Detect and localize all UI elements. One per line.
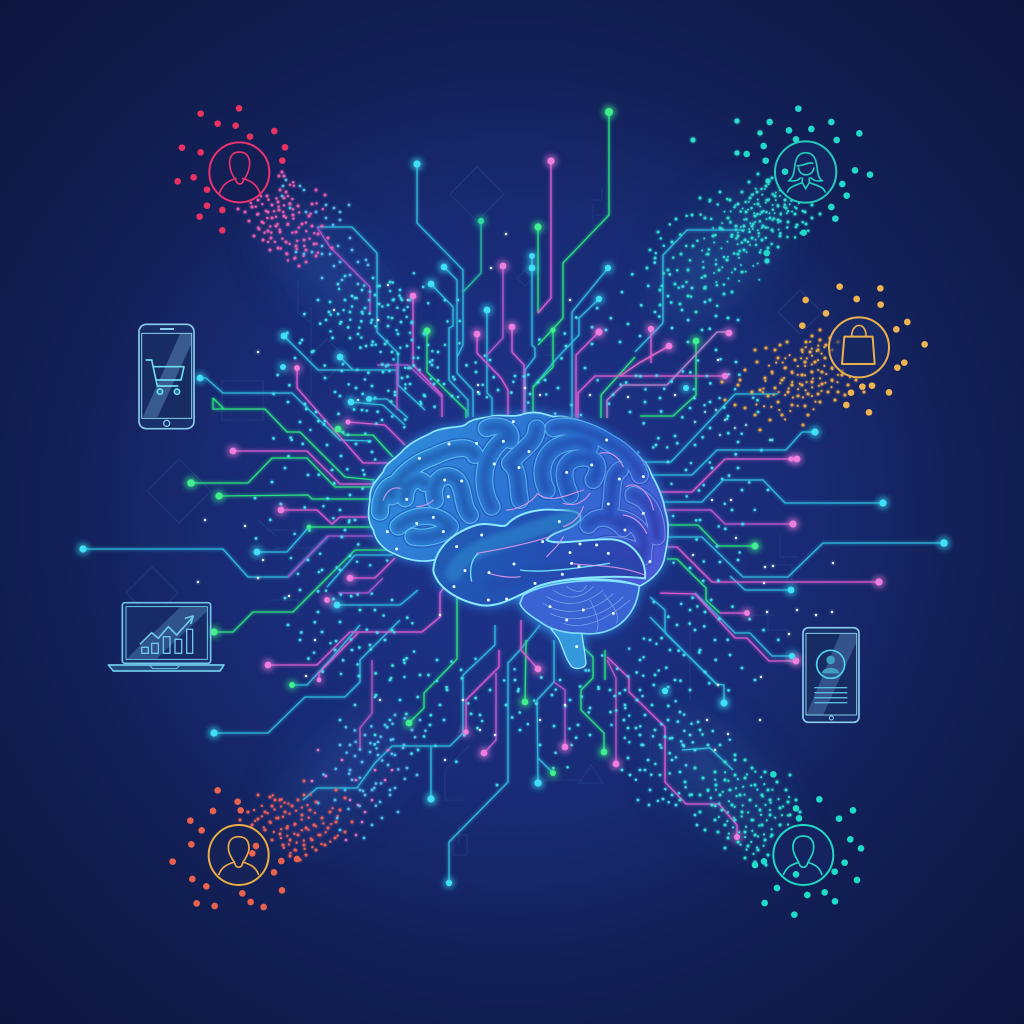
brain outer glow [369, 412, 668, 668]
particle stream: bottom left [240, 699, 427, 864]
icon: profile tablet [803, 628, 859, 722]
cerebrum silhouette [369, 412, 668, 606]
pink particles [238, 172, 332, 266]
particle stream: right orange [695, 330, 864, 440]
brain [369, 412, 668, 668]
circuit traces: pink and purple [233, 161, 879, 837]
brain stem [547, 623, 586, 668]
temporal lobe [433, 510, 645, 606]
blue particles [335, 715, 420, 838]
central white particles [198, 234, 833, 760]
brain sparkle dots [387, 422, 650, 647]
circuit traces: cyan [83, 164, 944, 883]
pink fold highlights [383, 453, 653, 577]
central cyan particles [255, 284, 772, 785]
icon: laptop with rising chart [108, 603, 224, 671]
cyan nodes [79, 160, 948, 886]
particle stream: top left [238, 172, 440, 400]
icon: orange person with dots [173, 790, 297, 907]
particle stream: top right [647, 121, 820, 318]
pink particles [312, 750, 392, 840]
cerebellum [520, 581, 639, 634]
cyan particles [326, 276, 434, 398]
green nodes [187, 108, 759, 776]
icon: teal person with dots [755, 774, 861, 915]
icon: shopping bag with amber dots [802, 287, 925, 412]
icon: shopping cart phone [139, 324, 194, 429]
icon: teal woman with dots [747, 109, 870, 253]
amber particles [722, 330, 864, 430]
sparse cyan particles [622, 690, 735, 825]
faint decorative circuitry [126, 167, 822, 855]
teal particles [680, 755, 800, 865]
teal particles [647, 172, 820, 318]
particle stream: bottom right [614, 680, 800, 865]
large teal accent particles [693, 121, 768, 261]
particle field around brain [198, 234, 833, 822]
circuit traces: green [191, 112, 755, 752]
blue particles [282, 180, 368, 284]
glowing end nodes [79, 108, 948, 886]
pink nodes [230, 157, 883, 840]
icon: red person with dots [178, 108, 285, 230]
soft stream glows [249, 174, 805, 865]
coral particles [240, 781, 352, 860]
brain folds [380, 426, 657, 557]
mixed teal and pink particles [695, 410, 770, 440]
